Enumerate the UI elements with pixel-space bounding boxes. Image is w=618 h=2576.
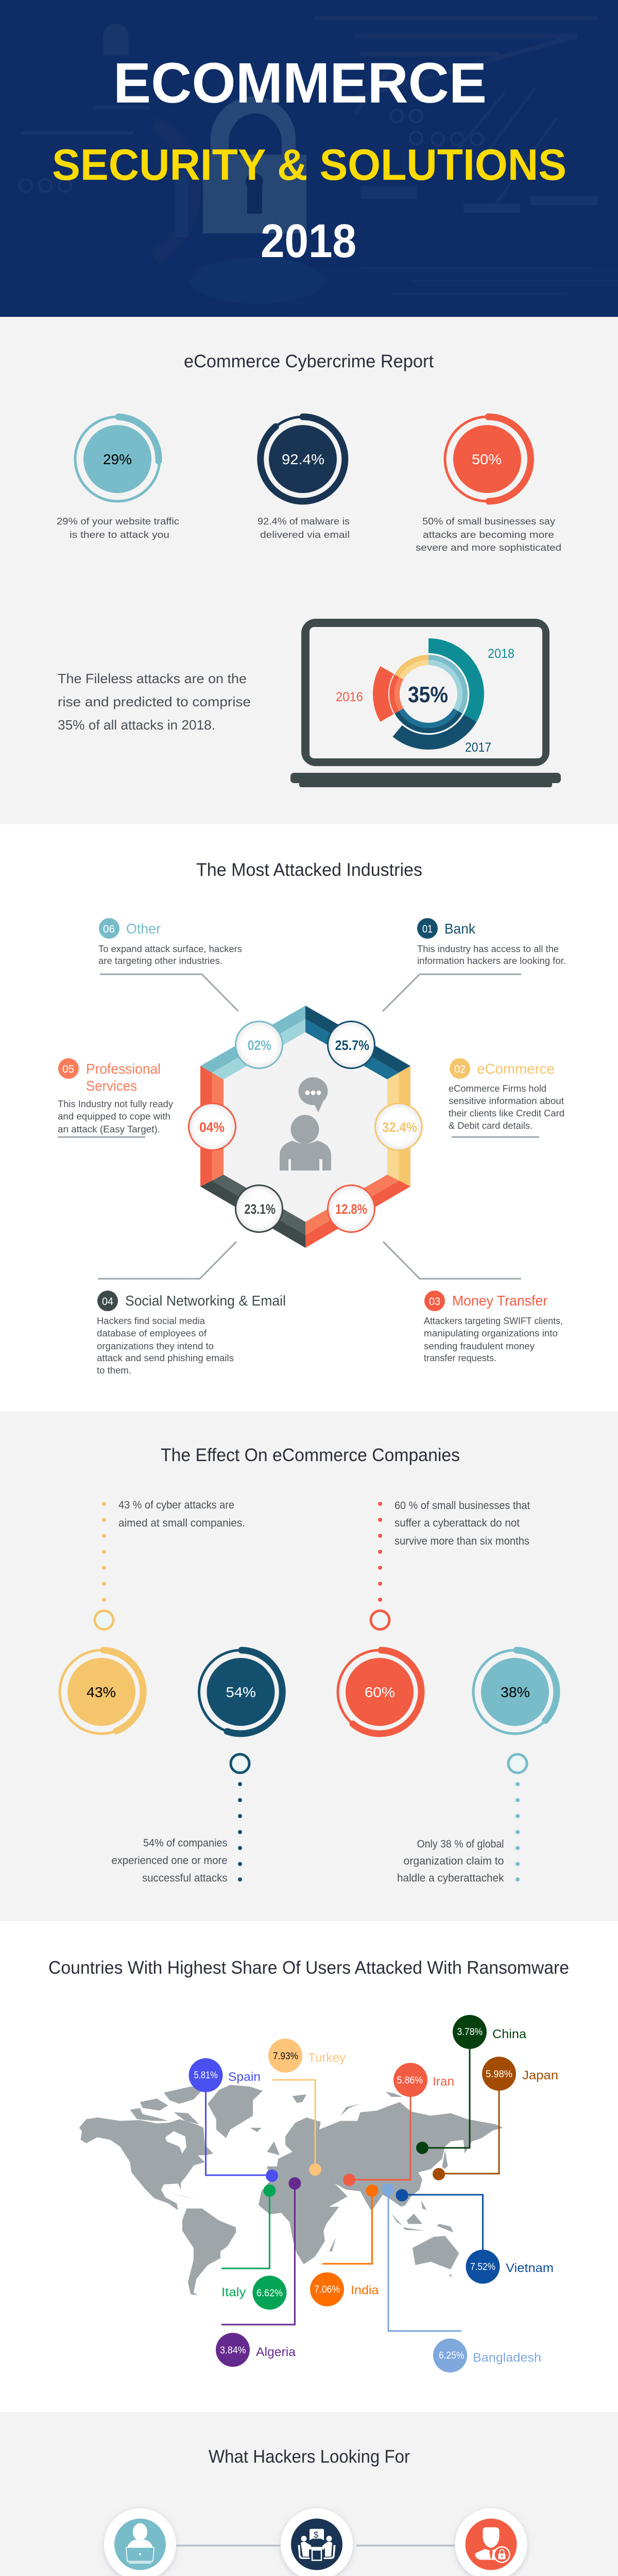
marker: Japan xyxy=(433,2057,558,2180)
marker: India: 7.06% xyxy=(314,2284,340,2295)
marker: Algeria: Algeria xyxy=(256,2345,296,2359)
marker: Iran xyxy=(343,2063,454,2186)
item: 03 money transfer: 03 xyxy=(429,1296,440,1308)
chart: donut 35%: 2016 xyxy=(336,690,363,704)
item: 04 social networking: Hackers find social media xyxy=(97,1316,205,1326)
item: 05 professional services: Services xyxy=(86,1078,137,1094)
item: 04 social networking: organizations they intend to xyxy=(97,1341,214,1351)
heading: countries: Countries With Highest Share Of Users Attacked With Ransomware xyxy=(48,1958,569,1978)
marker: China: 3.78% xyxy=(457,2027,483,2038)
marker: Spain xyxy=(188,2058,278,2182)
item: 02 ecommerce: sensitive information about xyxy=(449,1096,564,1106)
item: 04 social networking: attack and send phishing emails xyxy=(97,1353,234,1363)
dotted connector: 60% xyxy=(371,1502,389,1629)
item: 02 ecommerce: eCommerce Firms hold xyxy=(449,1083,546,1094)
item: 05 professional services: an attack (Easy Target). xyxy=(58,1124,160,1134)
item: 02 ecommerce: & Debit card details. xyxy=(449,1121,533,1131)
marker: Bangladesh xyxy=(382,2183,541,2372)
text: 50% caption: 50% of small businesses say xyxy=(422,516,555,527)
text: 60% note: 60 % of small businesses that xyxy=(394,1500,530,1512)
item: 01 bank xyxy=(417,918,566,966)
dotted connector: 54% xyxy=(231,1754,249,1882)
badge: 12.8%: 12.8% xyxy=(335,1201,367,1217)
text: 29% caption: is there to attack you xyxy=(70,530,169,540)
panel: effect on ecommerce companies xyxy=(0,1411,618,1921)
item: 02 ecommerce: 02 xyxy=(454,1063,466,1075)
stat ring: 54% xyxy=(199,1650,282,1734)
stat ring: 92.4%: 92.4% xyxy=(282,451,324,467)
marker: Italy xyxy=(221,2184,286,2310)
marker: China: China xyxy=(492,2027,527,2041)
panel: ransomware countries xyxy=(0,1921,618,2412)
item: 04 social networking: Social Networking & Email xyxy=(125,1293,286,1309)
item: 03 money transfer: Attackers targeting SWIFT clients, xyxy=(424,1316,563,1326)
marker: Iran: Iran xyxy=(433,2075,454,2089)
marker: India xyxy=(310,2184,379,2307)
text: 38% note: Only 38 % of global xyxy=(417,1838,504,1850)
badge: 12.8% xyxy=(328,1185,375,1232)
marker: Vietnam: 7.52% xyxy=(470,2262,495,2273)
item: 05 professional services: Professional xyxy=(86,1061,161,1077)
text: 60% note: survive more than six months xyxy=(394,1535,529,1547)
text: fileless attacks: rise and predicted to comprise xyxy=(58,694,251,709)
chart: donut 35%: 35% xyxy=(408,682,448,707)
text: 92.4% caption: delivered via email xyxy=(260,530,350,540)
text: 38% note: haldle a cyberattachek xyxy=(397,1872,504,1884)
header banner xyxy=(0,0,618,317)
panel: ecommerce cybercrime report xyxy=(0,317,618,824)
item: 06 other: To expand attack surface, hackers xyxy=(98,944,242,954)
marker: Italy: Italy xyxy=(221,2285,246,2299)
chart: donut 35%: 2018 xyxy=(488,647,514,661)
icon: person with speech bubble xyxy=(280,1077,331,1171)
text: 43% note xyxy=(118,1499,245,1529)
marker: Algeria xyxy=(216,2177,301,2367)
item: 01 bank: 01 xyxy=(422,923,433,935)
text: 60% note xyxy=(394,1500,530,1547)
text: 54% note: successful attacks xyxy=(142,1872,228,1884)
marker: Japan: Japan xyxy=(522,2069,558,2082)
stat ring: 50% xyxy=(445,417,531,501)
stat ring: 60% xyxy=(338,1650,421,1734)
icon: financial meeting: $ xyxy=(314,2530,319,2540)
marker: Iran: 5.86% xyxy=(397,2075,423,2086)
text: 92.4% caption xyxy=(258,516,350,540)
marker: Algeria: 3.84% xyxy=(220,2345,246,2356)
dotted connector: 43% xyxy=(95,1502,113,1629)
dotted connector: 38% xyxy=(508,1754,527,1882)
badge: 04%: 04% xyxy=(199,1120,225,1135)
marker: Italy: 6.62% xyxy=(256,2288,283,2299)
chart: world map xyxy=(79,2085,503,2295)
heading: hackers: What Hackers Looking For xyxy=(209,2447,410,2467)
item: 06 other xyxy=(98,918,242,966)
icon: financial meeting xyxy=(281,2508,353,2576)
item: 04 social networking xyxy=(97,1291,286,1376)
stat ring: 29%: 29% xyxy=(103,451,132,467)
marker: Turkey xyxy=(268,2039,346,2176)
stat ring: 43% xyxy=(60,1650,143,1734)
item: 03 money transfer: Money Transfer xyxy=(452,1293,547,1309)
text: 38% note: organization claim to xyxy=(404,1855,504,1867)
marker: Bangladesh: Bangladesh xyxy=(473,2351,541,2365)
text: 54% note xyxy=(111,1837,228,1884)
item: 06 other: 06 xyxy=(103,923,115,935)
item: 03 money transfer xyxy=(424,1291,563,1363)
text: 50% caption: attacks are becoming more xyxy=(423,530,554,540)
item: 04 social networking: to them. xyxy=(97,1365,131,1376)
badge: 32.4%: 32.4% xyxy=(382,1120,417,1135)
text: 50% caption xyxy=(416,516,561,553)
marker: Spain: 5.81% xyxy=(194,2070,218,2081)
marker: Turkey: 7.93% xyxy=(273,2051,298,2062)
marker: Spain: Spain xyxy=(228,2070,261,2084)
item: 04 social networking: database of employees of xyxy=(97,1328,207,1338)
stat ring: 38%: 38% xyxy=(501,1684,530,1700)
text: 60% note: suffer a cyberattack do not xyxy=(394,1517,520,1529)
text: 43% note: aimed at small companies. xyxy=(118,1517,245,1529)
text: 29% caption xyxy=(57,516,179,540)
badge: 04% xyxy=(188,1104,236,1150)
marker: China xyxy=(416,2015,527,2154)
badge: 02%: 02% xyxy=(247,1038,271,1053)
stat ring: 50%: 50% xyxy=(472,451,502,467)
item: 05 professional services xyxy=(58,1058,173,1134)
marker: Bangladesh: 6.25% xyxy=(439,2350,465,2361)
icon: laptop xyxy=(290,619,561,787)
item: 03 money transfer: manipulating organizations into xyxy=(424,1328,558,1338)
marker: Vietnam: Vietnam xyxy=(506,2261,554,2275)
panel: most attacked industries xyxy=(0,824,618,1411)
stat ring: 92.4% xyxy=(261,417,345,501)
badge: 02% xyxy=(236,1021,282,1069)
title: ECOMMERCE: ECOMMERCE xyxy=(113,52,487,115)
text: 43% note: 43 % of cyber attacks are xyxy=(118,1499,234,1511)
item: 02 ecommerce xyxy=(449,1058,564,1131)
title: SECURITY & SOLUTIONS: SECURITY & SOLUTIONS xyxy=(52,141,566,190)
item: 06 other: are targeting other industries. xyxy=(98,956,222,966)
heading: industries: The Most Attacked Industries xyxy=(196,860,422,880)
item: 02 ecommerce: their clients like Credit Card xyxy=(449,1108,564,1118)
text: fileless attacks xyxy=(58,671,251,733)
title: 2018: 2018 xyxy=(261,215,356,267)
stat ring: 38% xyxy=(473,1650,557,1734)
badge: 32.4% xyxy=(375,1104,422,1150)
item: 01 bank: This industry has access to all the xyxy=(417,944,559,954)
stat ring: 60%: 60% xyxy=(365,1684,395,1700)
stat ring: 54%: 54% xyxy=(226,1684,256,1700)
chart: hexagon xyxy=(188,1006,422,1248)
marker: Vietnam xyxy=(396,2189,554,2284)
item: 05 professional services: 05 xyxy=(62,1063,74,1075)
text: 38% note xyxy=(397,1838,504,1884)
text: fileless attacks: 35% of all attacks in 2018. xyxy=(58,717,215,733)
item: 02 ecommerce: eCommerce xyxy=(477,1061,555,1077)
badge: 23.1%: 23.1% xyxy=(244,1201,276,1217)
badge: 25.7%: 25.7% xyxy=(335,1038,369,1053)
text: 54% note: 54% of companies xyxy=(143,1837,228,1849)
item: 04 social networking: 04 xyxy=(102,1296,113,1308)
marker: Japan: 5.98% xyxy=(486,2069,512,2080)
text: 29% caption: 29% of your website traffic xyxy=(57,516,179,527)
icon: user with lock xyxy=(455,2508,527,2576)
marker: Turkey: Turkey xyxy=(308,2051,346,2065)
item: 05 professional services: and equipped to cope with xyxy=(58,1111,170,1122)
panel: what hackers looking for xyxy=(0,2412,618,2576)
item: 03 money transfer: sending fraudulent money xyxy=(424,1341,535,1351)
text: 50% caption: severe and more sophisticated xyxy=(416,543,561,553)
item: 01 bank: Bank xyxy=(444,921,476,937)
item: 01 bank: information hackers are looking for. xyxy=(417,956,566,966)
icon: customer with laptop xyxy=(104,2508,176,2576)
heading: effect: The Effect On eCommerce Companies xyxy=(161,1445,460,1465)
text: 54% note: experienced one or more xyxy=(111,1855,228,1867)
text: 92.4% caption: 92.4% of malware is xyxy=(258,516,350,527)
stat ring: 43%: 43% xyxy=(87,1684,116,1700)
badge: 23.1% xyxy=(236,1185,282,1232)
stat ring: 29% xyxy=(75,417,160,501)
item: 03 money transfer: transfer requests. xyxy=(424,1353,496,1363)
item: 05 professional services: This Industry not fully ready xyxy=(58,1099,173,1109)
badge: 25.7% xyxy=(328,1021,375,1069)
chart: donut 35% xyxy=(336,646,514,755)
chart: donut 35%: 2017 xyxy=(465,740,491,755)
text: fileless attacks: The Fileless attacks are on the xyxy=(58,671,247,686)
heading: report: eCommerce Cybercrime Report xyxy=(184,351,434,371)
marker: India: India xyxy=(351,2283,379,2297)
item: 06 other: Other xyxy=(126,921,161,937)
